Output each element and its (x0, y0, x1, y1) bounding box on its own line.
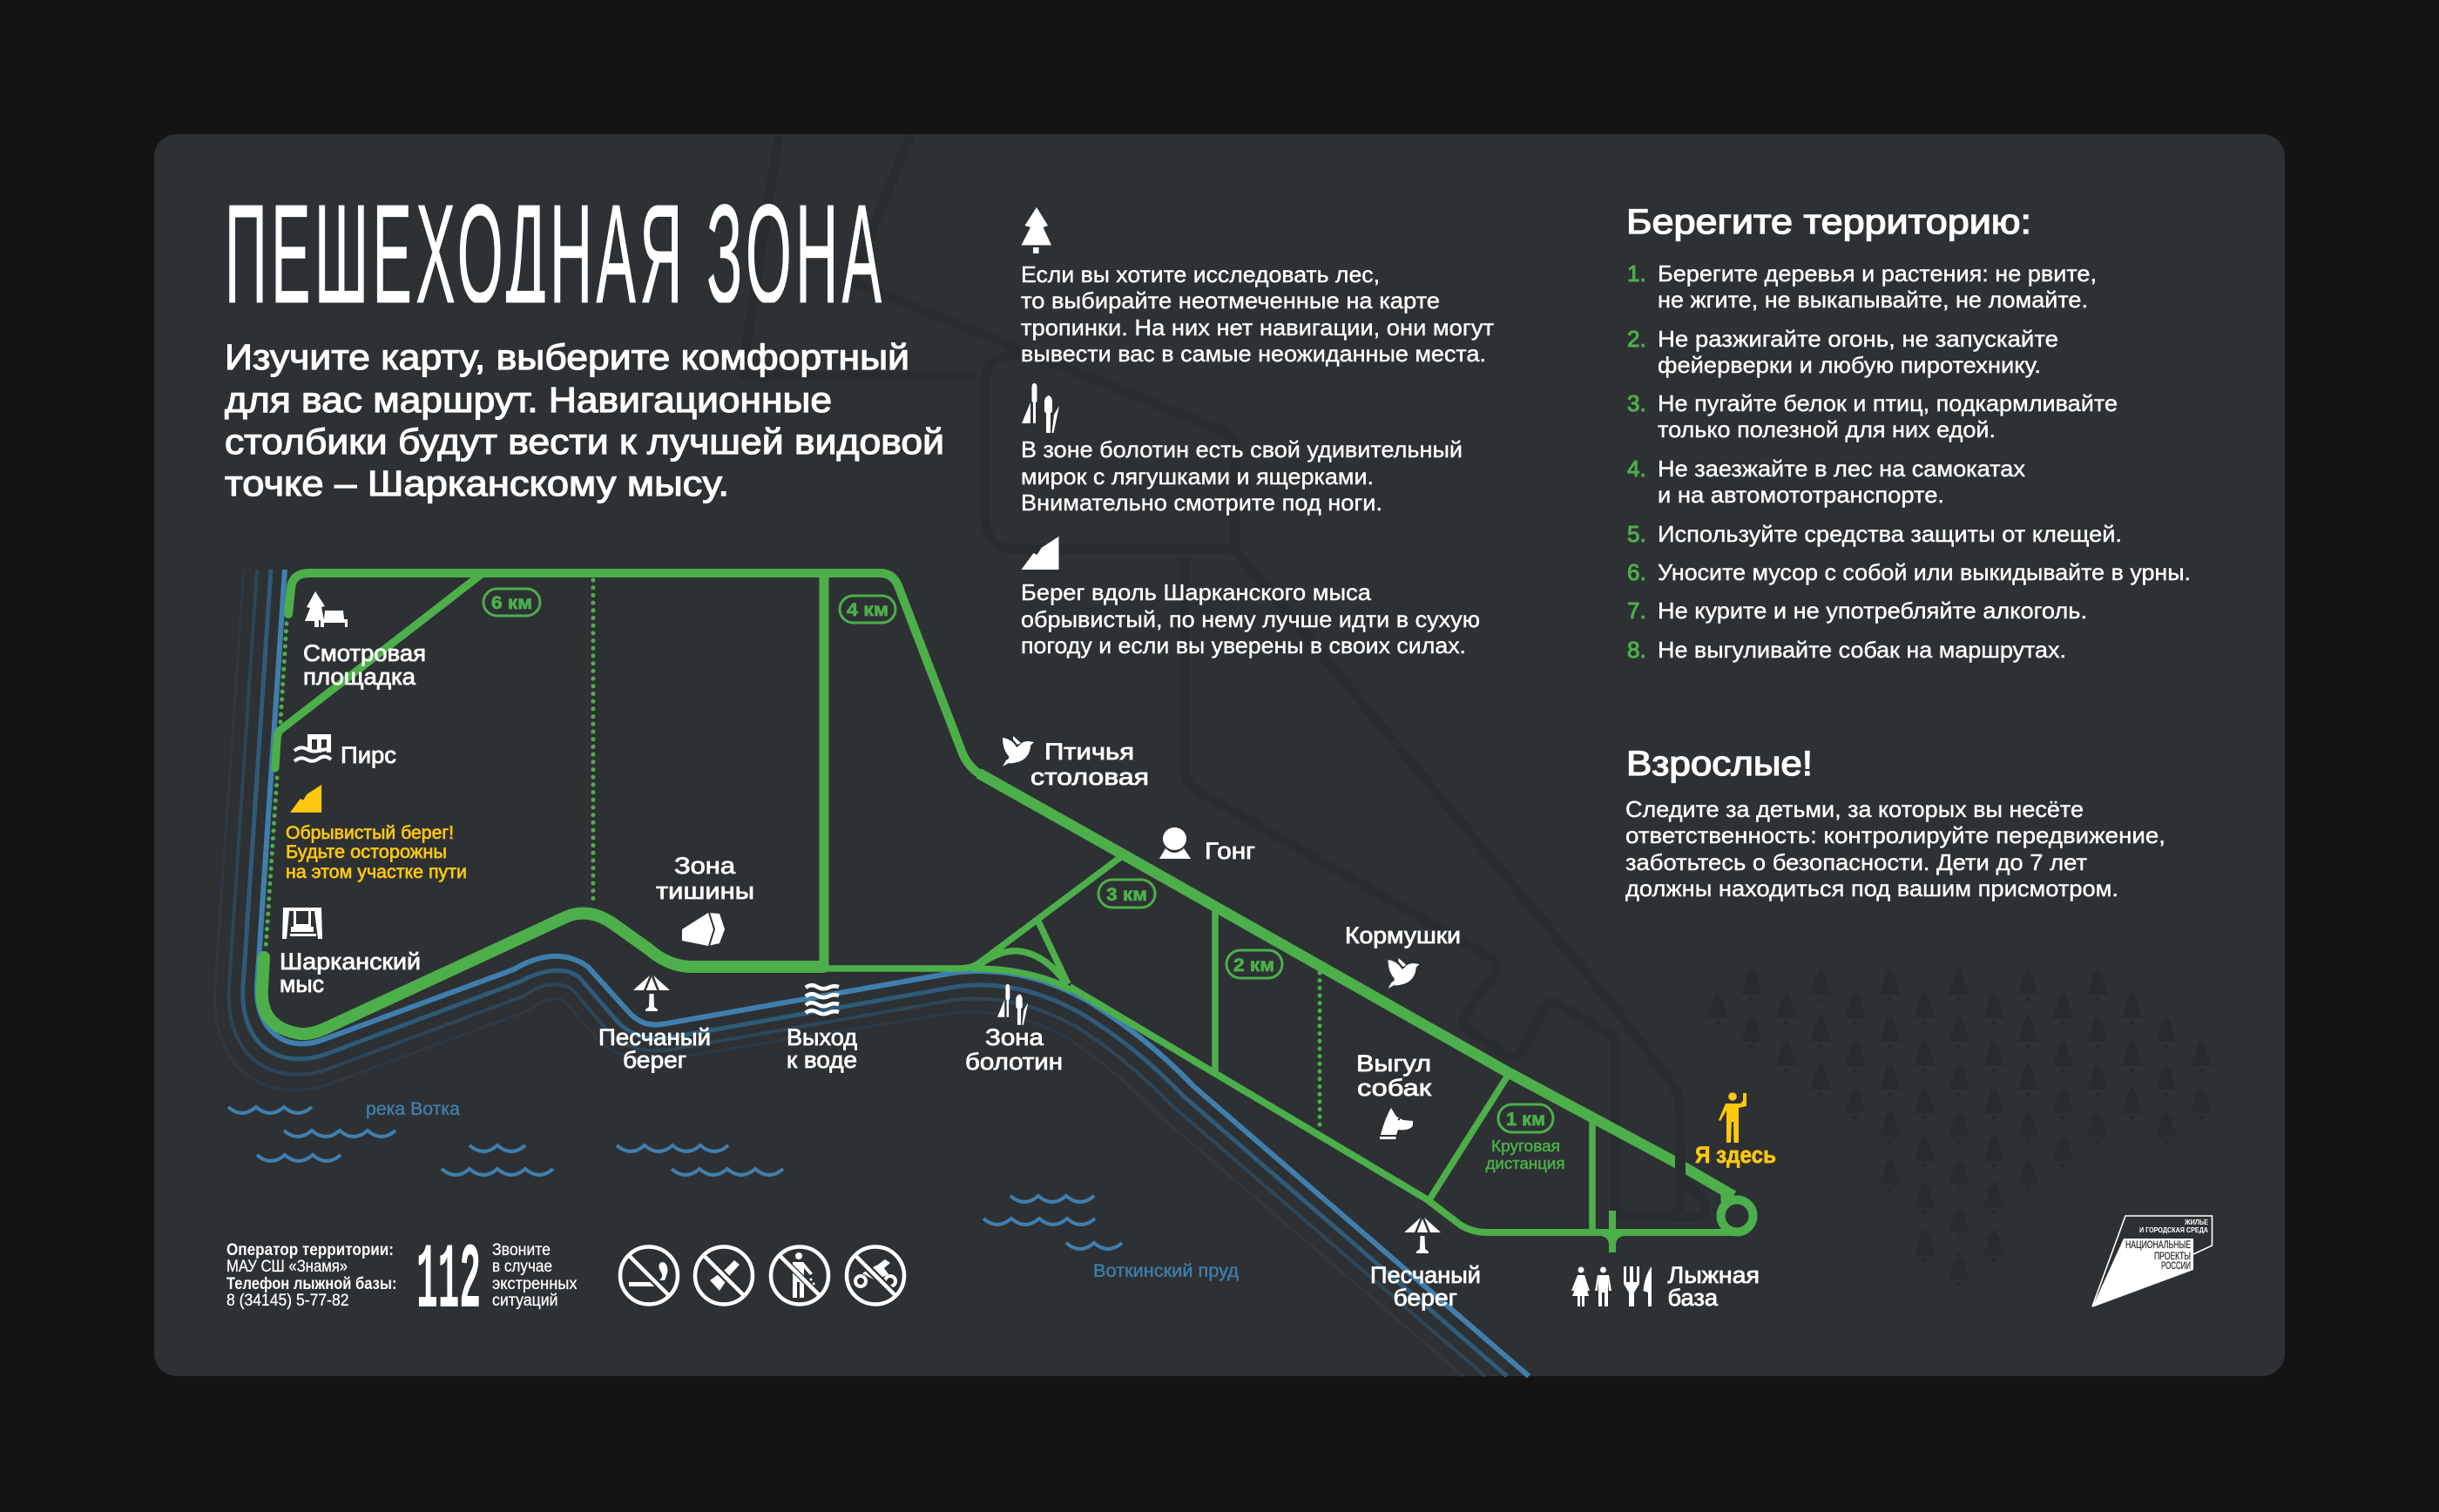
label: viewpoint: Смотровая (303, 640, 426, 666)
rules list: не жгите, не выкапывайте, не ломайте. (1658, 287, 2088, 313)
logo: national projects: НАЦИОНАЛЬНЫЕ (2125, 1239, 2191, 1251)
list numbers: 3. (1627, 390, 1646, 416)
label: pond: Воткинский пруд (1093, 1261, 1239, 1281)
label: dog walking: собак (1357, 1075, 1431, 1101)
rules list (1627, 260, 2191, 663)
icon: feeder bird (1388, 958, 1420, 989)
title: ПЕШЕХОДНАЯ ЗОНА (225, 176, 882, 333)
background road crossing (1675, 1151, 1686, 1183)
rules list: Не курите и не употребляйте алкоголь. (1658, 597, 2087, 624)
label: gong: Гонг (1205, 838, 1255, 864)
pill: 6 km (483, 589, 540, 616)
operator contacts (226, 1241, 397, 1310)
list numbers (1627, 260, 1646, 663)
label: dog walking: Выгул (1356, 1050, 1431, 1077)
list numbers: 4. (1627, 456, 1646, 482)
logo: national projects (2092, 1216, 2213, 1307)
icon: pier (294, 734, 331, 761)
label: viewpoint: площадка (303, 664, 416, 690)
map: walking routes (262, 573, 1753, 1252)
pill: 2 km: 2 км (1233, 955, 1274, 975)
icon: cliff (1021, 537, 1059, 570)
list numbers: 1. (1627, 260, 1646, 287)
label: circular distance: дистанция (1486, 1155, 1564, 1172)
icon: swing (282, 908, 322, 939)
route: 4 km cut (819, 573, 829, 967)
pill: 3 km: 3 км (1106, 885, 1147, 905)
icon: steep shore warning (290, 785, 321, 813)
emergency note: Звоните (492, 1241, 551, 1259)
cliff note: обрывистый, по нему лучше идти в сухую (1021, 606, 1480, 632)
distance pills (483, 589, 1553, 1132)
icon: water access waves (806, 985, 839, 1014)
pill: 3 km (1098, 880, 1155, 908)
route: turning loop (1721, 1200, 1753, 1232)
label: ski base (1667, 1262, 1760, 1311)
label: feeders: Кормушки (1345, 922, 1461, 948)
adults text: должны находиться под вашим присмотром. (1625, 875, 2118, 901)
label: sandy shore east (1370, 1262, 1481, 1311)
route: pier link (275, 574, 482, 768)
label: cape (280, 948, 421, 997)
operator contacts: 8 (34145) 5-77-82 (226, 1292, 348, 1310)
intro text: Изучите карту, выберите комфортный (225, 337, 909, 377)
label: water access: Выход (787, 1024, 857, 1050)
intro text (225, 337, 944, 503)
label: cape: мыс (280, 971, 324, 997)
map: water waves (228, 1107, 1122, 1249)
map: river lines (215, 570, 1529, 1376)
swamp note (1021, 436, 1463, 516)
list numbers: 7. (1627, 597, 1646, 624)
icon: viewpoint tree and bench (305, 591, 348, 627)
forest note: тропинки. На них нет навигации, они могут (1021, 314, 1494, 341)
swamp note: мирок с лягушками и ящерками. (1021, 463, 1374, 489)
label: sandy shore east: берег (1394, 1285, 1457, 1311)
adults text (1625, 796, 2165, 901)
operator contacts: Телефон лыжной базы: (226, 1275, 397, 1293)
label: ski base: Лыжная (1667, 1262, 1760, 1288)
logo: national projects: ПРОЕКТЫ (2154, 1250, 2191, 1262)
icon: swamp reeds (997, 984, 1028, 1025)
icon: restrooms (1571, 1266, 1611, 1306)
cliff note: погоду и если вы уверены в своих силах. (1021, 632, 1466, 658)
background: forest of dark trees (1706, 967, 2213, 1286)
label: water access (787, 1024, 857, 1073)
label: quiet zone: тишины (656, 878, 754, 904)
label: swamp zone: болотин (965, 1049, 1063, 1075)
emergency note: в случае (492, 1258, 552, 1276)
label: dog walking (1356, 1050, 1431, 1101)
route: lower return (1070, 987, 1737, 1232)
swamp note: В зоне болотин есть свой удивительный (1021, 436, 1463, 462)
icon: gong (1159, 827, 1191, 859)
emergency note: ситуаций (492, 1292, 558, 1310)
route: dotted paths (266, 580, 1320, 1131)
icon: dog (1380, 1108, 1413, 1139)
rules list: Не заезжайте в лес на самокатах (1658, 456, 2025, 482)
label: swamp zone: Зона (985, 1024, 1044, 1050)
icon: sandy shore umbrella east (1404, 1216, 1441, 1253)
label: quiet zone: Зона (674, 853, 736, 879)
heading: rules: Берегите территорию: (1626, 203, 2031, 241)
callout: steep shore warning: на этом участке пути (286, 862, 467, 882)
route: ski base spur (1601, 1211, 1624, 1252)
rules list: Используйте средства защиты от клещей. (1658, 521, 2122, 547)
forest note: то выбирайте неотмеченные на карте (1021, 287, 1440, 314)
label: circular distance: Круговая (1491, 1137, 1560, 1155)
operator contacts: Оператор территории: (226, 1241, 394, 1259)
rules list: только полезной для них едой. (1658, 416, 1996, 442)
label: quiet zone (656, 853, 754, 904)
route: top loop (288, 573, 984, 777)
callout: steep shore warning: Будьте осторожны (286, 842, 447, 862)
intro text: точке – Шарканскому мысу. (225, 463, 729, 503)
intro text: столбики будут вести к лучшей видовой (225, 422, 944, 462)
logo: national projects: РОССИИ (2161, 1259, 2191, 1272)
list numbers: 8. (1627, 637, 1646, 663)
logo: national projects: ЖИЛЬЕ (2184, 1218, 2209, 1226)
operator contacts: МАУ СШ «Знамя» (226, 1258, 348, 1276)
label: sandy shore west: берег (623, 1047, 686, 1073)
rules list: Уносите мусор с собой или выкидывайте в урны. (1658, 559, 2191, 585)
swamp note: Внимательно смотрите под ноги. (1021, 489, 1382, 516)
route: 1 km cut (1429, 1075, 1592, 1232)
label: water access: к воде (787, 1047, 857, 1073)
label: bird canteen: Птичья (1044, 739, 1134, 765)
label: pier: Пирс (341, 742, 396, 768)
icon: cafe (1624, 1266, 1652, 1306)
icon: no smoking (620, 1247, 678, 1305)
label: sandy shore west: Песчаный (598, 1024, 711, 1050)
label: river: река Вотка (366, 1099, 460, 1119)
pill: 1 km: 1 км (1506, 1110, 1545, 1130)
icon: tree (1021, 207, 1051, 253)
route: swamp junction (819, 856, 1122, 990)
pill: 4 km (840, 596, 895, 623)
icon: no motor vehicles (847, 1247, 904, 1305)
list numbers: 5. (1627, 521, 1646, 547)
pill: 1 km (1498, 1104, 1553, 1132)
adults text: ответственность: контролируйте передвижение, (1625, 822, 2165, 848)
forest note (1021, 261, 1494, 367)
label: cape: Шарканский (280, 948, 421, 975)
pill: 2 km (1226, 950, 1282, 978)
rules list: Не пугайте белок и птиц, подкармливайте (1658, 390, 2118, 416)
label: circular distance (1486, 1137, 1564, 1172)
pill: 6 km: 6 км (491, 593, 532, 613)
icon: no littering (771, 1247, 828, 1305)
callout: steep shore warning: Обрывистый берег! (286, 823, 454, 843)
label: sandy shore east: Песчаный (1370, 1262, 1481, 1288)
label: swamp zone (965, 1024, 1063, 1075)
map labels (280, 640, 1760, 1311)
icon: bird canteen (1003, 736, 1034, 766)
icon: quiet zone horn (682, 913, 725, 946)
callout: steep shore warning (286, 823, 467, 882)
pill: 4 km: 4 км (847, 600, 888, 620)
label: ski base: база (1667, 1285, 1719, 1311)
text: 112 (416, 1230, 481, 1335)
adults text: заботьтесь о безопасности. Дети до 7 лет (1625, 849, 2087, 875)
label: bird canteen: столовая (1030, 764, 1149, 790)
icon: sandy shore umbrella west (633, 974, 670, 1011)
rules list: и на автомототранспорте. (1658, 482, 1944, 508)
label: sandy shore west (598, 1024, 711, 1073)
cliff note (1021, 579, 1480, 658)
heading: adults: Взрослые! (1626, 745, 1813, 783)
icon: reeds (1022, 383, 1059, 433)
label: you are here: Я здесь (1695, 1142, 1776, 1168)
route: loop joins (1720, 1190, 1740, 1236)
list numbers: 2. (1627, 326, 1646, 352)
emergency note: экстренных (492, 1275, 578, 1293)
icon: you are here person (1719, 1092, 1746, 1143)
forest note: вывести вас в самые неожиданные места. (1021, 341, 1486, 367)
forest note: Если вы хотите исследовать лес, (1021, 261, 1380, 287)
info column (1021, 207, 1494, 658)
emergency note (492, 1241, 578, 1310)
panel: sign board (154, 134, 2285, 1376)
logo: national projects: И ГОРОДСКАЯ СРЕДА (2139, 1226, 2208, 1234)
intro text: для вас маршрут. Навигационные (225, 380, 832, 420)
adults text: Следите за детьми, за которых вы несёте (1625, 796, 2084, 822)
cliff note: Берег вдоль Шарканского мыса (1021, 579, 1372, 605)
list numbers: 6. (1627, 559, 1646, 585)
background: faint forest roads (744, 136, 1706, 1218)
rules list: фейерверки и любую пиротехнику. (1658, 352, 2041, 378)
route: 2 km cut (1212, 908, 1219, 1074)
route: shore (262, 914, 823, 1034)
label: viewpoint (303, 640, 426, 690)
rules list: Берегите деревья и растения: не рвите, (1658, 260, 2097, 287)
label: bird canteen (1030, 739, 1149, 790)
route: main diagonal (979, 773, 1733, 1196)
rules list: Не выгуливайте собак на маршрутах. (1658, 637, 2066, 663)
icon: no alcohol (695, 1247, 753, 1305)
rules list: Не разжигайте огонь, не запускайте (1658, 326, 2058, 352)
